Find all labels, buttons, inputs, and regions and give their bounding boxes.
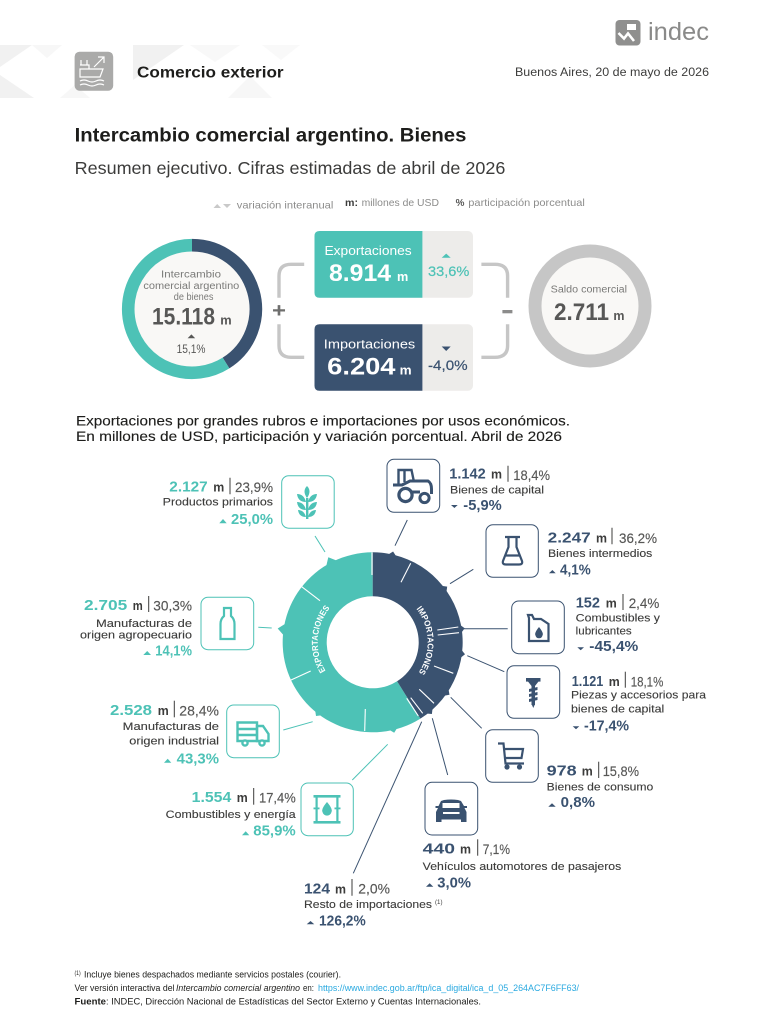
footnotes: en: [303,983,314,993]
item: vehículos automotores: 3,0% [437,875,471,891]
item: piezas y accesorios: bienes de capital [571,704,664,716]
donut: intercambio comercial [128,245,256,373]
item: productos primarios: 2.127 [169,479,208,496]
donut: saldo comercial [535,251,645,361]
legend: millones de USD [362,197,439,209]
icon: oil can [528,615,548,641]
item: bienes de capital: 18,4% [513,468,550,483]
item: resto de importaciones: Resto de importaciones [304,899,433,911]
item: manufacturas de origen industrial: 2.528 [110,702,152,719]
icon: bottle [220,608,234,639]
item: bienes de capital: m [491,466,502,481]
footnotes: Incluye bienes despachados mediante servicios postales (courier). [84,969,341,979]
item: vehículos automotores: 7,1% [483,842,510,857]
item: combustibles y lubricantes: -45,4% [589,639,638,655]
item: bienes intermedios: m [596,530,607,545]
item: bienes de consumo: 15,8% [603,764,639,779]
donut: intercambio comercial: m [220,312,232,327]
item: vehículos automotores: 440 [423,841,455,858]
legend [214,197,585,211]
item: bienes de capital [387,459,550,546]
item: resto de importaciones: (1) [435,899,442,906]
item: combustibles y energía: Combustibles y energía [166,809,297,821]
item: bienes de consumo [451,697,653,811]
item: bienes de consumo: m [582,764,593,779]
item: resto de importaciones: m [335,881,346,896]
icon: shopping cart [498,744,524,764]
item: bienes intermedios: Bienes intermedios [548,548,653,560]
footnotes: https://www.indec.gob.ar/ftp/ica_digital/ica_d_05_264AC7F6FF63/ [318,983,579,993]
logo: indec: indec [648,18,709,46]
panel: exportaciones: Exportaciones [324,243,412,258]
item: bienes intermedios: 2.247 [548,529,591,546]
item: manufacturas de origen agropecuario: 14,1% [155,643,192,659]
panel: importaciones [314,324,473,391]
icon: truck [238,722,268,746]
donut: intercambio comercial: 15.118 [152,303,215,330]
item: piezas y accesorios [467,656,707,735]
title: Intercambio comercial argentino. Bienes [75,126,466,147]
item: manufacturas de origen agropecuario: 2.705 [84,597,127,614]
item: productos primarios [163,476,334,552]
item: manufacturas de origen industrial: Manufacturas de [123,721,219,733]
item: piezas y accesorios: 1.121 [572,673,603,690]
item: bienes de consumo: Bienes de consumo [547,782,653,794]
icon: wheat [297,486,317,519]
item: combustibles y lubricantes [464,594,661,655]
panel: exportaciones: m [397,269,408,284]
item: resto de importaciones [304,722,442,929]
donut: saldo comercial: m [613,308,624,323]
panel: importaciones: m [400,363,412,378]
item: combustibles y energía: 1.554 [192,789,232,806]
item: resto de importaciones: 2,0% [358,882,390,897]
donut: intercambio comercial: 15,1% [177,342,206,356]
footnotes: Ver versión interactiva del [74,983,174,993]
item: bienes de capital: -5,9% [463,498,502,514]
item: manufacturas de origen agropecuario: 30,3% [153,598,192,614]
item: combustibles y lubricantes: 2,4% [629,596,659,611]
subtitle: Resumen ejecutivo. Cifras estimadas de abril de 2026 [75,158,505,178]
item: bienes intermedios: 4,1% [560,562,591,578]
item: piezas y accesorios: -17,4% [584,719,629,735]
item: productos primarios: 25,0% [231,512,273,528]
panel: exportaciones [314,231,473,298]
item: manufacturas de origen industrial: m [158,703,169,718]
footnotes: Fuente [74,997,106,1007]
panel: importaciones: Importaciones [324,336,416,351]
item: combustibles y lubricantes: Combustibles y [576,613,661,625]
icon: tractor [393,470,432,503]
right bracket with minus [481,264,512,357]
item: bienes de consumo: 978 [547,763,577,780]
item: manufacturas de origen industrial: origen industrial [129,735,219,747]
item: piezas y accesorios: Piezas y accesorios para [571,689,707,701]
section heading [76,413,570,444]
chart: central donut exports and imports: EXPORTACIONES [312,606,329,674]
icon: oil barrel [314,795,340,824]
donut: intercambio comercial: comercial argentino [143,281,240,292]
item: combustibles y energía [166,744,388,839]
section heading: En millones de USD, participación y variación porcentual. Abril de 2026 [76,428,562,444]
legend: m: [345,197,358,209]
icon: ship with export arrow [75,52,113,91]
item: bienes de capital: Bienes de capital [450,485,544,497]
item: combustibles y lubricantes: lubricantes [576,626,632,638]
item: combustibles y energía: m [237,790,248,805]
item: combustibles y lubricantes: 152 [576,595,600,612]
donut: saldo comercial: 2.711 [554,299,609,326]
item: resto de importaciones: 124 [304,880,331,897]
panel: importaciones: -4,0% [428,357,468,373]
donut: intercambio comercial: Intercambio [161,270,221,281]
icon: car [436,800,467,822]
item: manufacturas de origen agropecuario: m [133,598,143,613]
footnotes: Intercambio comercial argentino [176,983,300,993]
item: manufacturas de origen agropecuario [80,596,272,659]
section heading: Exportaciones por grandes rubros e importaciones por usos económicos. [76,413,570,429]
item: manufacturas de origen agropecuario: origen agropecuario [80,630,192,642]
footnotes [74,969,579,1007]
icon: flask [503,537,522,564]
item: manufacturas de origen industrial: 43,3% [177,751,219,767]
item: productos primarios: 23,9% [235,480,273,495]
left bracket with plus: + [272,300,286,322]
item: combustibles y energía: 17,4% [259,790,296,805]
logo: indec [616,18,709,46]
panel: exportaciones: 33,6% [428,263,469,279]
section label: Comercio exterior [137,65,284,82]
left bracket with plus [272,264,304,357]
footnotes: (1) [74,971,81,977]
donut: intercambio comercial: de bienes [174,292,213,303]
item: bienes de consumo: 0,8% [561,795,595,811]
item: vehículos automotores: m [460,842,471,857]
item: manufacturas de origen industrial [110,701,313,767]
item: manufacturas de origen agropecuario: Manufacturas de [96,618,192,630]
item: manufacturas de origen industrial: 28,4% [179,703,219,718]
item: productos primarios: m [213,480,224,495]
item: piezas y accesorios: m [609,674,620,689]
item: piezas y accesorios: 18,1% [631,674,663,689]
item: resto de importaciones: 126,2% [319,913,366,929]
icon: screw [526,678,540,708]
item: combustibles y energía: 85,9% [253,823,296,839]
item: bienes intermedios: 36,2% [619,531,657,546]
item: vehículos automotores: Vehículos automotores de pasajeros [423,861,622,873]
item: vehículos automotores [423,718,622,891]
chart: central donut exports and imports [278,552,465,733]
legend: participación porcentual [468,197,585,209]
date: Buenos Aires, 20 de mayo de 2026 [515,67,709,79]
donut: saldo comercial: Saldo comercial [551,285,627,296]
panel: importaciones: 6.204 [327,354,396,381]
header background pattern [0,45,300,98]
item: bienes de capital: 1.142 [449,465,486,482]
chart: central donut exports and imports: IMPORTACIONES [416,606,434,675]
item: productos primarios: Productos primarios [163,497,274,509]
item: combustibles y lubricantes: m [606,596,617,611]
footnotes: : INDEC, Dirección Nacional de Estadísticas del Sector Externo y Cuentas Internacionales. [106,997,481,1007]
legend: % [456,197,465,209]
item: bienes intermedios [450,525,657,584]
panel: exportaciones: 8.914 [329,260,392,287]
legend: variación interanual [237,199,333,211]
